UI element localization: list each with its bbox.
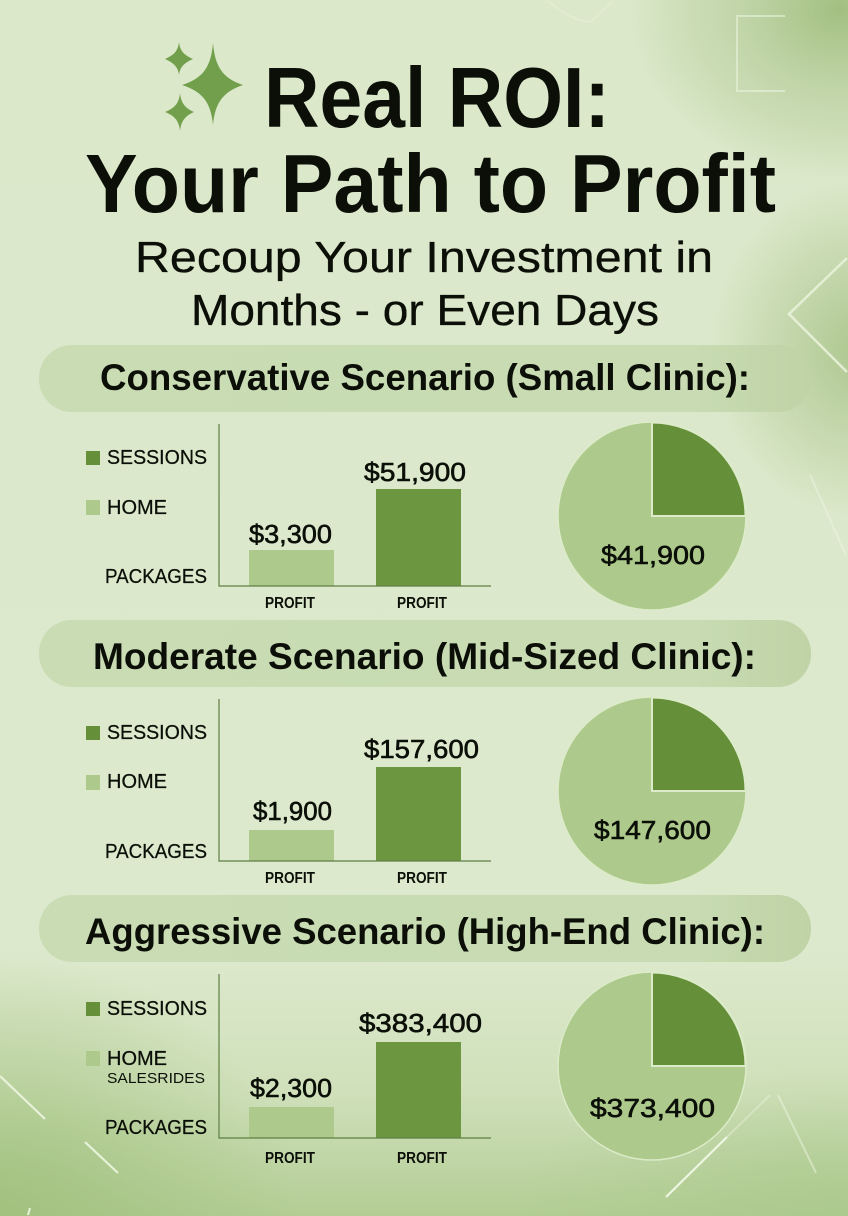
legend: SESSIONS xyxy=(107,722,207,744)
pie chart xyxy=(558,697,746,885)
bar chart: PROFIT xyxy=(265,870,315,887)
bar chart xyxy=(219,974,491,1167)
legend: PACKAGES xyxy=(105,841,207,863)
panel: conservative scenario xyxy=(39,345,811,612)
bar chart: PROFIT xyxy=(265,595,315,612)
legend: SESSIONS xyxy=(107,447,207,469)
legend xyxy=(86,722,207,863)
heading: conservative xyxy=(39,345,811,412)
pie chart xyxy=(558,972,746,1160)
icon: sparkles xyxy=(165,42,243,131)
legend: SESSIONS xyxy=(107,998,207,1020)
pie chart: $373,400 xyxy=(590,1093,715,1123)
bar chart: $2,300 xyxy=(250,1073,332,1103)
bar chart: PROFIT xyxy=(397,1150,447,1167)
pie chart: $41,900 xyxy=(601,540,705,570)
title: Real ROI: xyxy=(264,51,610,146)
subtitle: Recoup Your Investment in xyxy=(135,233,713,282)
title xyxy=(85,51,776,230)
heading: conservative: Conservative Scenario (Small Clinic): xyxy=(100,357,750,398)
bar chart: $3,300 xyxy=(249,519,332,549)
bar chart: $1,900 xyxy=(253,796,332,826)
title: Your Path to Profit xyxy=(85,137,776,230)
bar chart: $383,400 xyxy=(359,1008,482,1038)
bar chart: PROFIT xyxy=(397,595,447,612)
bar chart: PROFIT xyxy=(397,870,447,887)
legend: SALESRIDES xyxy=(107,1070,205,1087)
legend: HOME xyxy=(107,771,167,793)
legend xyxy=(86,998,207,1139)
subtitle: Months - or Even Days xyxy=(191,286,659,335)
bar chart: $157,600 xyxy=(364,734,479,764)
legend: PACKAGES xyxy=(105,1117,207,1139)
bar chart xyxy=(219,424,491,612)
heading: aggressive: Aggressive Scenario (High-End Clinic): xyxy=(85,911,765,952)
subtitle xyxy=(135,233,713,335)
legend: PACKAGES xyxy=(105,566,207,588)
heading: moderate xyxy=(39,620,811,687)
legend: HOME xyxy=(107,497,167,519)
bar chart: $51,900 xyxy=(364,457,466,487)
pie chart xyxy=(558,422,746,610)
heading: moderate: Moderate Scenario (Mid-Sized Clinic): xyxy=(93,636,756,677)
bar chart: PROFIT xyxy=(265,1150,315,1167)
legend xyxy=(86,447,207,588)
legend: HOME xyxy=(107,1048,167,1070)
heading: aggressive xyxy=(39,895,811,962)
panel: aggressive scenario xyxy=(39,895,811,1167)
pie chart: $147,600 xyxy=(594,815,711,845)
bar chart xyxy=(219,699,491,887)
panel: moderate scenario xyxy=(39,620,811,887)
